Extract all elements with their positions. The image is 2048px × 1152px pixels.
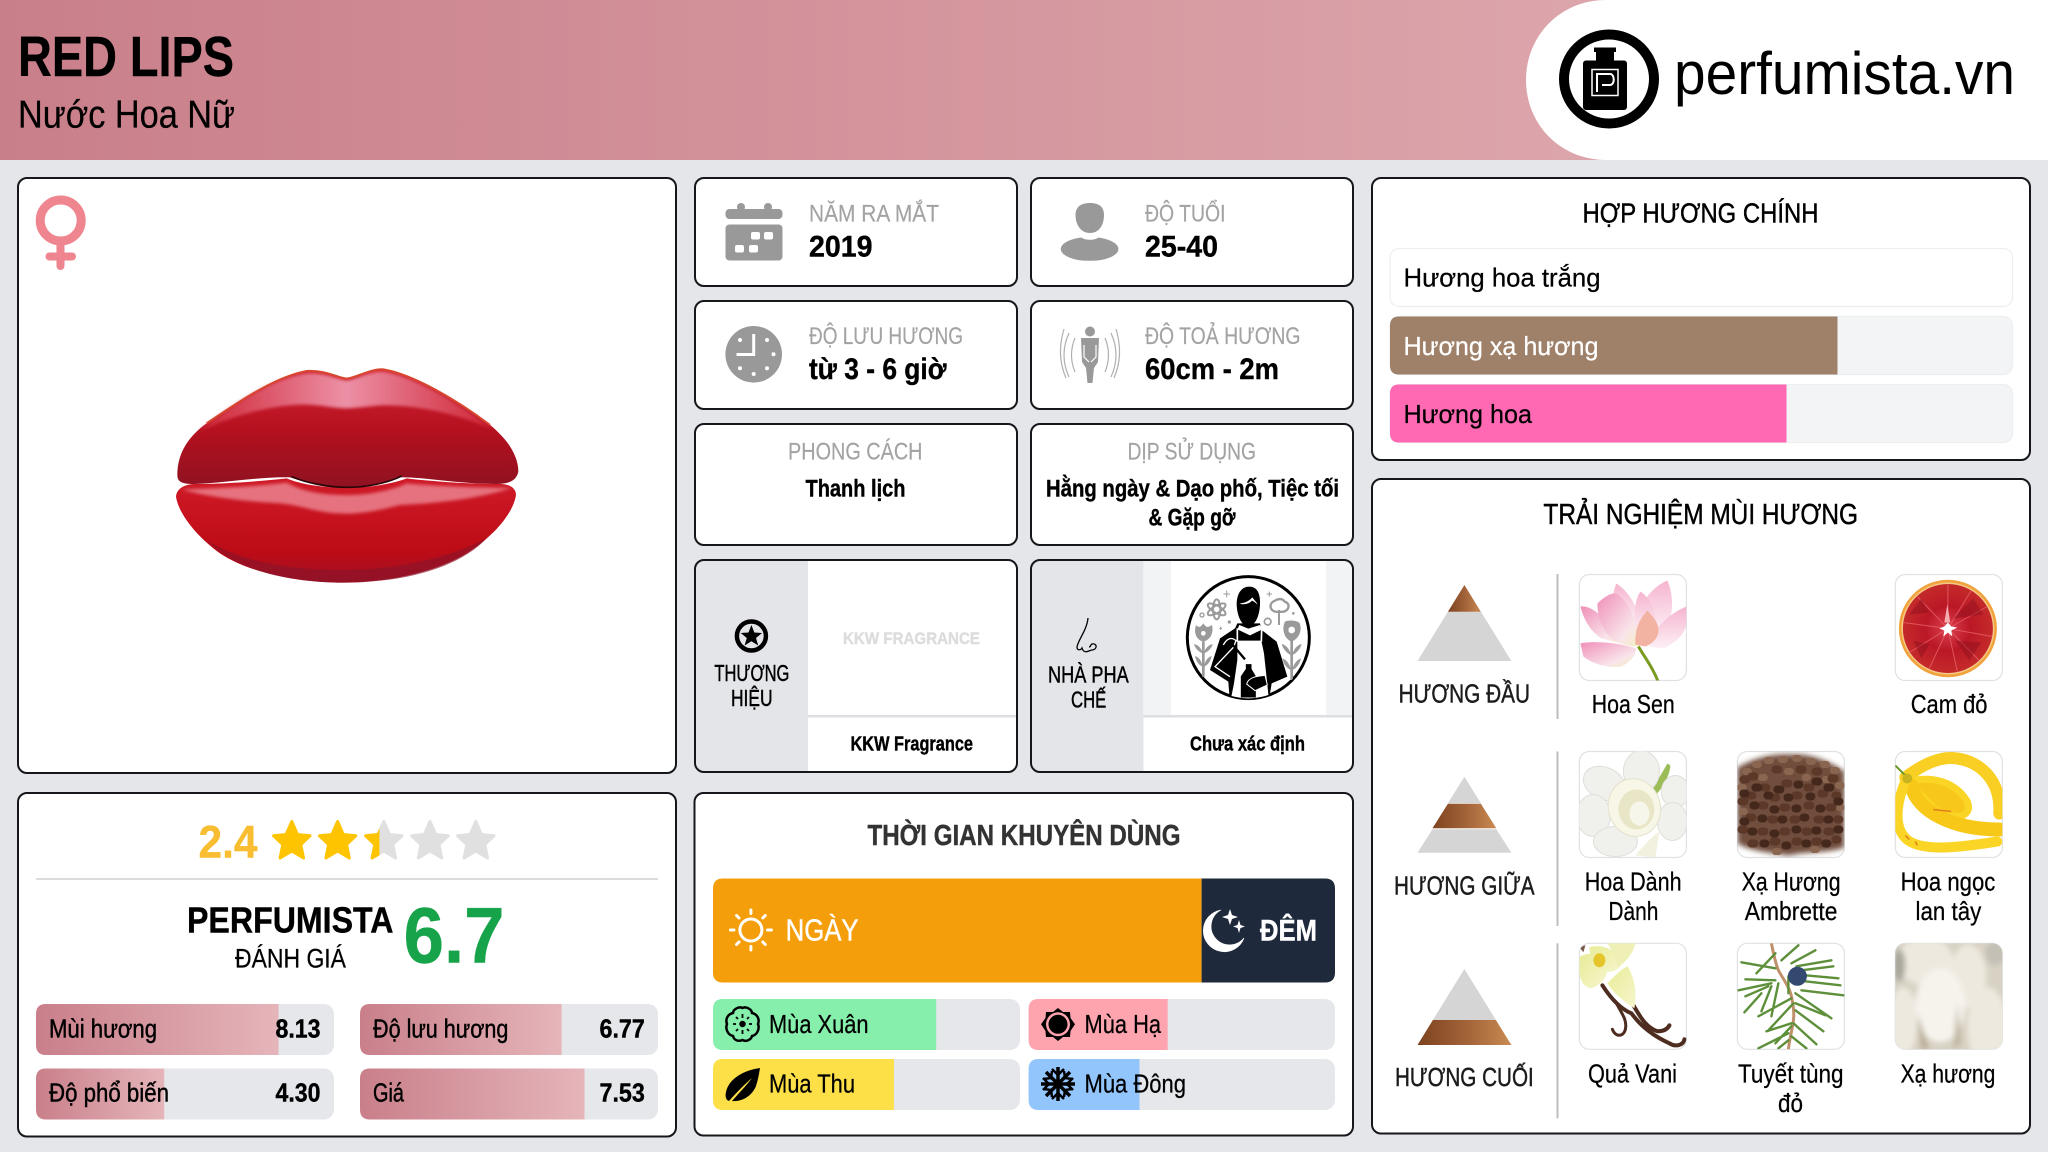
- heading: THỜI GIAN KHUYÊN DÙNG: [868, 818, 1180, 852]
- bar: popularity: [36, 1068, 334, 1120]
- label: night: ĐÊM: [1260, 914, 1317, 948]
- ingredient: ambrette seeds: [1737, 752, 1844, 858]
- bar: autumn: Mùa Thu: [769, 1068, 855, 1098]
- bar: popularity: 4.30: [276, 1078, 320, 1108]
- card: brand: [695, 560, 1017, 772]
- accord: white floral: Hương hoa trắng: [1404, 262, 1600, 292]
- label: NĂM RA MẮT: [809, 200, 939, 228]
- label: PHONG CÁCH: [788, 438, 922, 465]
- card: occasion: [1031, 424, 1353, 545]
- header banner: [0, 0, 2048, 160]
- bar: popularity: Độ phổ biến: [49, 1078, 169, 1108]
- caption: Hoa Dành: [1585, 866, 1682, 896]
- value: Hằng ngày & Dạo phố, Tiệc tối: [1046, 474, 1339, 502]
- icon: person: [1061, 203, 1118, 261]
- caption: Tuyết tùng: [1738, 1058, 1844, 1088]
- panel: ratings: ĐÁNH GIÁ: [235, 943, 346, 973]
- accord: floral: Hương hoa: [1404, 399, 1533, 429]
- ingredient: blood orange: [1895, 574, 2002, 680]
- label: DỊP SỬ DỤNG: [1128, 436, 1256, 465]
- bar: night: [1202, 878, 1335, 982]
- label: ĐỘ TUỔI: [1145, 200, 1226, 228]
- value: KKW Fragrance: [850, 734, 973, 756]
- icon: star badge: [737, 622, 766, 650]
- bar: summer: [1029, 999, 1335, 1050]
- label: ĐỘ LƯU HƯƠNG: [809, 322, 963, 350]
- row: middle notes: lan tây: [1916, 896, 1981, 926]
- row: base notes: đỏ: [1778, 1088, 1803, 1118]
- row: middle notes: [1394, 750, 2002, 926]
- label: THƯƠNG: [714, 660, 789, 686]
- icon: sun: [730, 910, 772, 950]
- panel: product image: [18, 178, 676, 773]
- caption: Hoa Sen: [1592, 689, 1675, 719]
- heading: HỢP HƯƠNG CHÍNH: [1582, 198, 1818, 228]
- panel: scent experience: [1372, 479, 2030, 1134]
- value: 2019: [809, 230, 872, 264]
- ingredient: ylang ylang: [1895, 752, 2002, 858]
- gray botanicals: [1200, 591, 1292, 680]
- value: từ 3 - 6 giờ: [809, 353, 947, 386]
- bar: autumn: [713, 1059, 1020, 1110]
- product: red lips bottle: [176, 369, 518, 583]
- row: middle notes: Dành: [1608, 896, 1658, 926]
- ingredient: juniper: [1737, 943, 1844, 1049]
- accord: musk: [1390, 316, 2012, 374]
- illustration: perfumer: [1187, 577, 1309, 703]
- panel: recommended time: [694, 793, 1353, 1136]
- bar: winter: [1029, 1059, 1335, 1110]
- card: perfumer: [1031, 560, 1353, 772]
- row: middle notes: Ambrette: [1745, 896, 1837, 926]
- ingredient: gardenia: [1576, 750, 1689, 858]
- bar: price: 7.53: [600, 1078, 645, 1108]
- panel: main accords: [1372, 178, 2030, 460]
- bar: longevity: Độ lưu hương: [373, 1014, 508, 1044]
- bar: scent: Mùi hương: [49, 1014, 157, 1044]
- bar: price: Giá: [373, 1078, 404, 1108]
- icon: radiating person: [1060, 326, 1120, 383]
- label: HƯƠNG CUỐI: [1395, 1062, 1534, 1092]
- accord: musk: Hương xạ hương: [1404, 331, 1598, 361]
- star rating: [274, 822, 494, 858]
- bar: day: [713, 878, 1202, 982]
- icon: moon: [1203, 909, 1245, 952]
- icon: female symbol: [40, 200, 81, 266]
- icon: nose: [1077, 618, 1096, 652]
- panel: ratings: [18, 793, 676, 1136]
- caption: Cam đỏ: [1911, 689, 1988, 719]
- label: day: NGÀY: [786, 913, 859, 948]
- card: perfumer: CHẾ: [1071, 686, 1106, 712]
- icon: flower: [726, 1007, 759, 1041]
- bar: spring: [713, 999, 1020, 1050]
- row: top notes: [1399, 574, 2002, 719]
- card: age: [1031, 178, 1353, 286]
- user rating number: 2.4: [198, 816, 258, 868]
- bar: scent: [36, 1004, 334, 1055]
- bar: spring: Mùa Xuân: [769, 1009, 868, 1039]
- row: base notes: [1395, 937, 2007, 1118]
- title: RED LIPS: [18, 25, 234, 89]
- card: style: [695, 424, 1017, 545]
- label: ĐỘ TOẢ HƯƠNG: [1145, 321, 1300, 350]
- label: HƯƠNG GIỮA: [1394, 870, 1535, 900]
- bar: price: [360, 1068, 658, 1120]
- accord: white floral: [1390, 248, 2012, 306]
- ingredient: musk: [1894, 942, 2003, 1050]
- icon: leaf: [726, 1068, 760, 1101]
- subtitle: Nước Hoa Nữ: [18, 94, 235, 136]
- brand logo wordmark: KKW FRAGRANCE: [843, 629, 980, 648]
- value: Thanh lịch: [806, 476, 906, 502]
- bar: scent: 8.13: [276, 1014, 320, 1044]
- score value: 6.7: [404, 890, 505, 980]
- bar: longevity: 6.77: [600, 1014, 645, 1044]
- value: 60cm - 2m: [1145, 353, 1279, 386]
- label: NHÀ PHA: [1048, 662, 1129, 688]
- value: 25-40: [1145, 230, 1218, 264]
- icon: summer sun: [1041, 1008, 1075, 1041]
- card: launch year: [695, 178, 1017, 286]
- accord: floral: [1390, 384, 2012, 442]
- caption: Hoa ngọc: [1901, 866, 1995, 896]
- icon: pyramid base: [1418, 969, 1511, 1045]
- card: projection: [1031, 301, 1353, 409]
- card: longevity: [695, 301, 1017, 409]
- label: HƯƠNG ĐẦU: [1399, 678, 1530, 708]
- card: brand: HIỆU: [731, 685, 772, 711]
- logo wordmark: perfumista.vn: [1674, 40, 2015, 107]
- bar: winter: Mùa Đông: [1084, 1068, 1186, 1098]
- logo icon: perfume bottle: [1564, 34, 1654, 124]
- caption: Xạ Hương: [1742, 866, 1840, 896]
- icon: calendar: [726, 203, 782, 260]
- value: Chưa xác định: [1190, 734, 1305, 756]
- heading: TRẢI NGHIỆM MÙI HƯƠNG: [1543, 497, 1858, 531]
- icon: clock: [725, 326, 782, 383]
- ingredient: vanilla: [1579, 943, 1686, 1049]
- icon: pyramid top: [1418, 585, 1511, 661]
- logo plate: [1526, 0, 2048, 160]
- score label: PERFUMISTA: [187, 899, 394, 940]
- bar: longevity: [360, 1004, 658, 1055]
- icon: pyramid middle: [1418, 777, 1511, 853]
- card: occasion: & Gặp gỡ: [1148, 504, 1236, 531]
- caption: Quả Vani: [1588, 1058, 1677, 1088]
- silhouette: [1237, 587, 1260, 626]
- ingredient: lotus: [1579, 574, 1686, 682]
- caption: Xạ hương: [1901, 1058, 1995, 1088]
- bar: summer: Mùa Hạ: [1084, 1009, 1161, 1039]
- icon: snowflake: [1041, 1067, 1075, 1101]
